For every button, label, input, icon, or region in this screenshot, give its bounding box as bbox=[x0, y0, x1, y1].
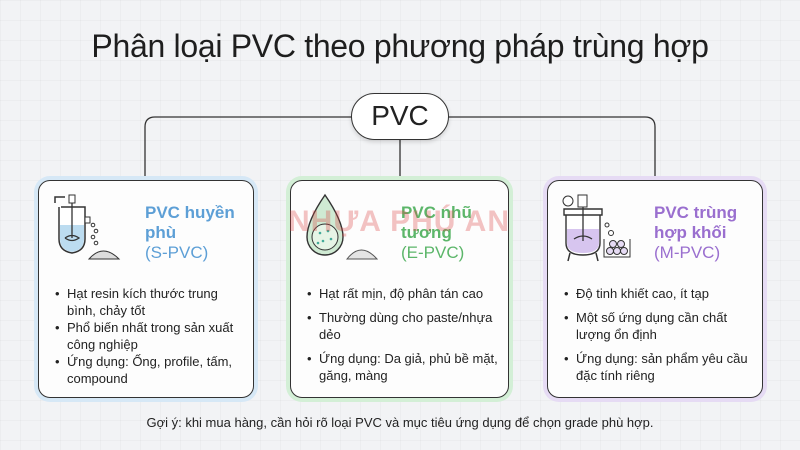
bullet list: Thường dùng cho paste/nhựa dẻo bbox=[319, 310, 492, 342]
heading: PVC trùng bbox=[654, 203, 737, 222]
root node: PVC bbox=[351, 93, 449, 140]
bullet list: Ứng dụng: Da giả, phủ bề mặt, găng, màng bbox=[319, 351, 498, 383]
bullet list: Độ tinh khiết cao, ít tạp bbox=[576, 286, 709, 301]
title: Phân loại PVC theo phương pháp trùng hợp bbox=[91, 28, 709, 64]
heading bbox=[401, 203, 472, 262]
footer note: Gợi ý: khi mua hàng, cần hỏi rõ loại PVC và mục tiêu ứng dụng để chọn grade phù hợp. bbox=[146, 415, 654, 430]
watermark: NHỰA PHÚ AN bbox=[288, 205, 510, 238]
panel: M-PVC bbox=[547, 180, 763, 398]
heading: PVC nhũ bbox=[401, 203, 472, 222]
bullet list: Phổ biến nhất trong sản xuất công nghiệp bbox=[67, 320, 233, 352]
root node: PVC: PVC bbox=[371, 100, 429, 131]
heading: hợp khối bbox=[654, 223, 727, 242]
bullet list: Ứng dụng: Ống, profile, tấm, compound bbox=[67, 354, 232, 386]
bullet list: Hạt resin kích thước trung bình, chảy tốt bbox=[67, 286, 218, 318]
heading: (E-PVC) bbox=[401, 243, 464, 262]
heading: tương bbox=[401, 223, 452, 242]
icon: suspension reactor bbox=[54, 194, 120, 260]
heading bbox=[145, 203, 235, 262]
bullet list bbox=[564, 286, 748, 383]
heading: PVC huyền bbox=[145, 203, 235, 222]
panel: E-PVC bbox=[290, 180, 509, 398]
heading: (S-PVC) bbox=[145, 243, 208, 262]
heading: (M-PVC) bbox=[654, 243, 720, 262]
bullet list bbox=[308, 286, 498, 383]
bullet list: Hạt rất mịn, độ phân tán cao bbox=[319, 286, 483, 301]
bullet list bbox=[56, 286, 234, 386]
bullet list: Ứng dụng: sản phẩm yêu cầu đặc tính riêng bbox=[576, 351, 748, 383]
icon: emulsion drop bbox=[306, 194, 378, 260]
panel: S-PVC bbox=[38, 180, 254, 398]
icon: bulk reactor bbox=[562, 194, 630, 262]
heading bbox=[654, 203, 737, 262]
heading: phù bbox=[145, 223, 176, 242]
bullet list: Một số ứng dụng cần chất lượng ổn định bbox=[576, 310, 727, 342]
